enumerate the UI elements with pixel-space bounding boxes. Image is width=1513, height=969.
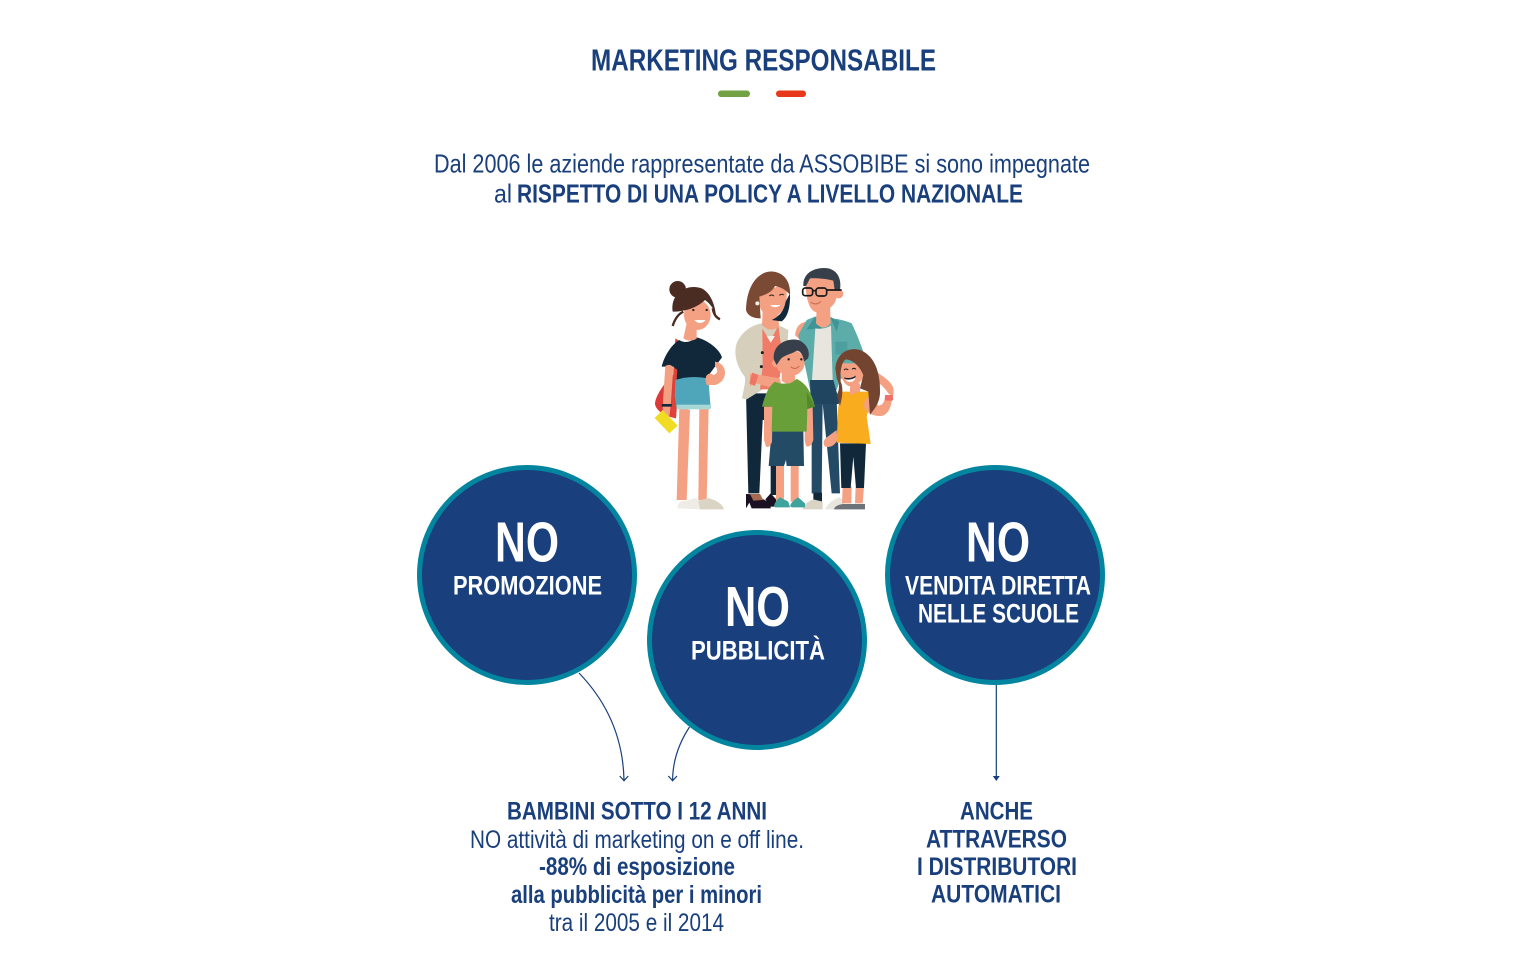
mother — [735, 272, 790, 508]
circle: no vendita diretta — [888, 468, 1102, 682]
intro text: RISPETTO DI UNA POLICY A LIVELLO NAZIONALE — [517, 178, 1023, 208]
circle: no pubblicita: NO — [725, 575, 790, 639]
circle: no vendita diretta: VENDITA DIRETTA — [905, 570, 1091, 600]
circle: no vendita diretta: NELLE SCUOLE — [918, 598, 1079, 628]
boy — [762, 339, 815, 507]
young girl — [824, 349, 894, 509]
text: distributori automatici — [917, 798, 1077, 908]
title: MARKETING RESPONSABILE — [591, 42, 936, 78]
circle: no promozione: NO — [495, 510, 559, 574]
teen girl — [655, 281, 725, 509]
text: bambini sotto i 12 anni — [470, 798, 804, 937]
arrow: promozione to text — [579, 673, 628, 781]
arrow: vendita diretta to text — [993, 684, 1000, 781]
text: distributori automatici: I DISTRIBUTORI — [917, 853, 1077, 881]
accent bars — [718, 90, 806, 97]
text: distributori automatici: AUTOMATICI — [931, 880, 1061, 908]
father — [795, 268, 865, 509]
text: distributori automatici: ANCHE — [960, 798, 1033, 826]
circle: no pubblicita: PUBBLICITÀ — [691, 634, 825, 666]
text: bambini sotto i 12 anni: BAMBINI SOTTO I 12 ANNI — [507, 798, 767, 826]
circle: no pubblicita — [650, 532, 864, 748]
text: bambini sotto i 12 anni: alla pubblicità per i minori — [511, 881, 762, 909]
text: bambini sotto i 12 anni: NO attività di marketing on e off line. — [470, 826, 804, 854]
circle: no vendita diretta: NO — [966, 510, 1030, 574]
illustration: family — [655, 268, 894, 509]
circle: no promozione — [420, 468, 634, 682]
intro text: Dal 2006 le aziende rappresentate da ASSOBIBE si sono impegnate — [434, 148, 1090, 178]
text: bambini sotto i 12 anni: tra il 2005 e il 2014 — [549, 909, 724, 937]
arrow: pubblicita to text — [668, 727, 690, 781]
text: distributori automatici: ATTRAVERSO — [926, 826, 1067, 854]
intro text: al — [494, 178, 512, 208]
text: bambini sotto i 12 anni: -88% di esposizione — [539, 853, 735, 881]
circle: no promozione: PROMOZIONE — [453, 570, 602, 600]
intro text — [434, 148, 1090, 208]
